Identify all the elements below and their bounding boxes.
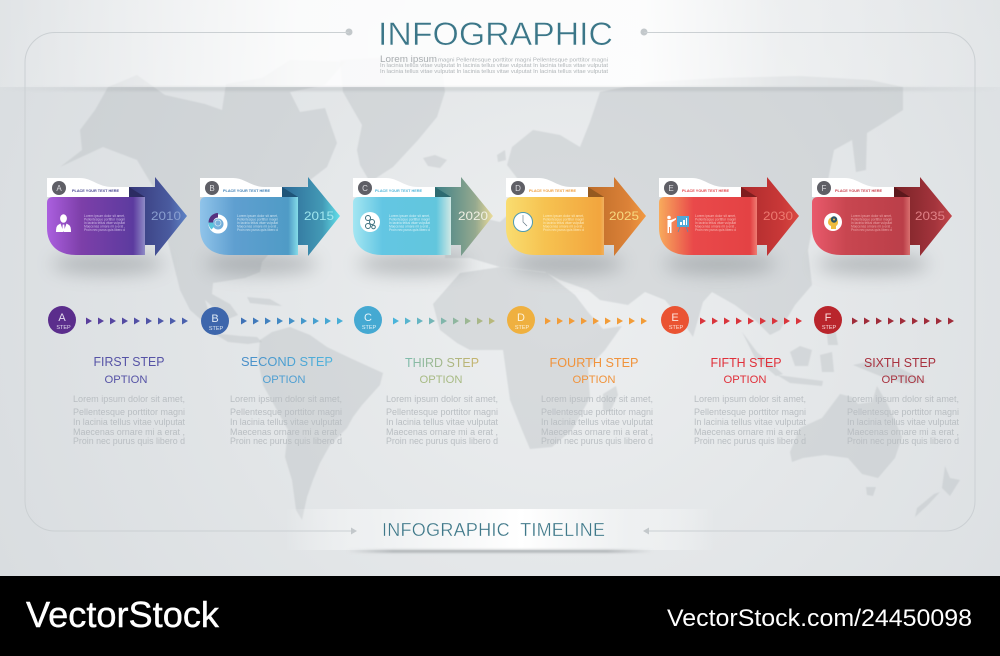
- step text E: OPTION: [724, 374, 767, 386]
- step text C: OPTION: [420, 374, 463, 386]
- step text C: Proin nec purus quis libero d: [386, 436, 498, 446]
- step text C: Maecenas ornare mi a erat ,: [386, 427, 498, 437]
- step text C: Lorem ipsum dolor sit amet,: [386, 394, 498, 404]
- card C: Proin nec purus quis libero d: [389, 228, 430, 232]
- card F: Proin nec purus quis libero d: [851, 228, 892, 232]
- card E: 2030: [763, 211, 793, 223]
- card A: Lorem ipsum dolor sit amet,: [84, 214, 125, 218]
- step text C: In lacinia tellus vitae vulputat: [386, 417, 498, 427]
- watermark bar: [0, 576, 1000, 656]
- step badge C: C: [364, 312, 372, 324]
- arrow row E: [700, 318, 802, 324]
- card B: [200, 177, 340, 274]
- step badge D: D: [517, 312, 525, 324]
- header subtitle: Lorem ipsum: [380, 54, 437, 65]
- step badge F: F: [825, 312, 832, 324]
- title: INFOGRAPHIC: [378, 16, 613, 52]
- step text E: Proin nec purus quis libero d: [694, 436, 806, 446]
- step text F: Proin nec purus quis libero d: [847, 436, 959, 446]
- outer rounded frame: [25, 32, 975, 531]
- card E: PLACE YOUR TEXT HERE: [682, 189, 729, 193]
- step text A: FIRST STEP: [94, 355, 164, 369]
- step text C: Pellentesque porttitor magni: [386, 407, 498, 417]
- card C: 2020: [458, 211, 488, 223]
- step badge B: B: [211, 313, 219, 325]
- card E: E: [668, 184, 674, 193]
- icon: hexagon network: [360, 212, 380, 232]
- card C: Lorem ipsum dolor sit amet,: [389, 214, 430, 218]
- card D: PLACE YOUR TEXT HERE: [529, 189, 576, 193]
- footer banner: [285, 509, 715, 552]
- card C: PLACE YOUR TEXT HERE: [375, 189, 422, 193]
- card D: [506, 177, 646, 274]
- step text F: Lorem ipsum dolor sit amet,: [847, 394, 959, 404]
- header subtitle: In lacinia tellus vitae vulputat In lacinia tellus vitae vulputat In lacinia tellus vitae vulputat: [380, 63, 609, 69]
- step text A: Lorem ipsum dolor sit amet,: [73, 394, 185, 404]
- arrow row C: [393, 318, 495, 324]
- card C: Maecenas ornare mi a erat ,: [389, 224, 430, 228]
- step badge B: [201, 307, 229, 335]
- step text C: [386, 356, 498, 446]
- card D: Lorem ipsum dolor sit amet,: [543, 214, 584, 218]
- step text F: Pellentesque porttitor magni: [847, 407, 959, 417]
- step text A: OPTION: [104, 374, 148, 386]
- step badge A: STEP: [56, 325, 71, 331]
- header band: [0, 0, 1000, 91]
- card D: Proin nec purus quis libero d: [543, 228, 584, 232]
- icon: head with gear: [824, 213, 842, 231]
- card E: In lacinia tellus vitae vulputat: [695, 221, 736, 225]
- step badge C: [354, 306, 382, 334]
- step text E: Maecenas ornare mi a erat ,: [694, 427, 806, 437]
- card B: Maecenas ornare mi a erat ,: [237, 224, 278, 228]
- step text F: OPTION: [882, 374, 925, 386]
- step badge D: STEP: [515, 325, 530, 331]
- card A: [47, 177, 187, 274]
- step badge F: [814, 306, 842, 334]
- step text B: Pellentesque porttitor magni: [230, 407, 342, 417]
- brand logo text: VectorStock: [26, 594, 220, 635]
- card D: Pellentesque porttitor magni: [543, 218, 584, 222]
- card D: Maecenas ornare mi a erat ,: [543, 224, 584, 228]
- step text D: OPTION: [572, 374, 616, 386]
- card A: Pellentesque porttitor magni: [84, 218, 125, 222]
- step text D: Lorem ipsum dolor sit amet,: [541, 394, 653, 404]
- step text F: [847, 356, 959, 446]
- step text B: Lorem ipsum dolor sit amet,: [230, 394, 342, 404]
- card C: Pellentesque porttitor magni: [389, 218, 430, 222]
- step text D: Proin nec purus quis libero d: [541, 436, 653, 446]
- icon: person: [56, 214, 71, 232]
- world map: [60, 55, 960, 520]
- card A: Proin nec purus quis libero d: [84, 228, 125, 232]
- arrow row B: [241, 318, 343, 324]
- card F: [812, 177, 952, 274]
- step text A: [73, 355, 185, 446]
- card B: Lorem ipsum dolor sit amet,: [237, 214, 278, 218]
- card C: In lacinia tellus vitae vulputat: [389, 221, 430, 225]
- card D: D: [515, 184, 521, 193]
- step text E: FIFTH STEP: [710, 356, 782, 370]
- step badge B: STEP: [209, 326, 224, 332]
- step badge E: [661, 306, 689, 334]
- image url: VectorStock.com/24450098: [667, 605, 972, 632]
- card A: 2010: [151, 211, 181, 223]
- card F: PLACE YOUR TEXT HERE: [835, 189, 882, 193]
- step text B: Maecenas ornare mi a erat ,: [230, 427, 342, 437]
- card A: A: [56, 184, 62, 193]
- card E: Lorem ipsum dolor sit amet,: [695, 214, 736, 218]
- step text A: Pellentesque porttitor magni: [73, 407, 185, 417]
- step text E: [694, 356, 806, 446]
- step text B: Proin nec purus quis libero d: [230, 436, 342, 446]
- step text B: OPTION: [262, 374, 306, 386]
- step text A: Maecenas ornare mi a erat ,: [73, 427, 185, 437]
- step badge A: A: [58, 312, 66, 324]
- step text F: Maecenas ornare mi a erat ,: [847, 427, 959, 437]
- step text D: Maecenas ornare mi a erat ,: [541, 427, 653, 437]
- card A: PLACE YOUR TEXT HERE: [72, 189, 119, 193]
- step text C: THIRD STEP: [405, 356, 479, 370]
- step badge A: [48, 306, 76, 334]
- arrow row D: [545, 318, 647, 324]
- icon: donut chart: [208, 213, 226, 232]
- card A: Maecenas ornare mi a erat ,: [84, 224, 125, 228]
- header subtitle: In lacinia tellus vitae vulputat In lacinia tellus vitae vulputat In lacinia tellus vitae vulputat: [380, 69, 609, 75]
- header subtitle: magni Pellentesque porttitor magni Pellentesque porttitor magni: [438, 58, 608, 64]
- step badge F: STEP: [822, 325, 837, 331]
- card D: 2025: [609, 211, 639, 223]
- card D: In lacinia tellus vitae vulputat: [543, 221, 584, 225]
- step text D: FOURTH STEP: [550, 356, 638, 370]
- card F: In lacinia tellus vitae vulputat: [851, 221, 892, 225]
- header subtitle: [380, 54, 609, 75]
- step text E: In lacinia tellus vitae vulputat: [694, 417, 806, 427]
- card B: Pellentesque porttitor magni: [237, 218, 278, 222]
- step badge E: E: [671, 312, 679, 324]
- icon: presenter and board: [667, 216, 689, 233]
- card B: 2015: [304, 211, 334, 223]
- card B: B: [209, 184, 215, 193]
- card A: In lacinia tellus vitae vulputat: [84, 221, 125, 225]
- card F: Maecenas ornare mi a erat ,: [851, 224, 892, 228]
- card F: Lorem ipsum dolor sit amet,: [851, 214, 892, 218]
- card E: [659, 177, 799, 274]
- step text A: Proin nec purus quis libero d: [73, 436, 185, 446]
- card B: Proin nec purus quis libero d: [237, 228, 278, 232]
- step badge C: STEP: [362, 325, 377, 331]
- card B: In lacinia tellus vitae vulputat: [237, 221, 278, 225]
- icon: clock: [514, 212, 532, 232]
- step text B: SECOND STEP: [241, 355, 333, 369]
- step text D: Pellentesque porttitor magni: [541, 407, 653, 417]
- card F: 2035: [915, 211, 945, 223]
- step text F: In lacinia tellus vitae vulputat: [847, 417, 959, 427]
- step text D: [541, 356, 653, 446]
- card E: Proin nec purus quis libero d: [695, 228, 736, 232]
- step text B: In lacinia tellus vitae vulputat: [230, 417, 342, 427]
- step badge D: [507, 306, 535, 334]
- footer title: INFOGRAPHIC TIMELINE: [382, 520, 605, 540]
- card C: C: [362, 184, 368, 193]
- step text F: SIXTH STEP: [864, 356, 936, 370]
- card F: Pellentesque porttitor magni: [851, 218, 892, 222]
- card C: [353, 177, 493, 274]
- step text D: In lacinia tellus vitae vulputat: [541, 417, 653, 427]
- card B: PLACE YOUR TEXT HERE: [223, 189, 270, 193]
- step text B: [230, 355, 342, 446]
- card F: F: [822, 184, 827, 193]
- step badge E: STEP: [669, 325, 684, 331]
- step text E: Lorem ipsum dolor sit amet,: [694, 394, 806, 404]
- arrow row A: [86, 318, 188, 324]
- card E: Pellentesque porttitor magni: [695, 218, 736, 222]
- card E: Maecenas ornare mi a erat ,: [695, 224, 736, 228]
- arrow row F: [852, 318, 954, 324]
- step text E: Pellentesque porttitor magni: [694, 407, 806, 417]
- step text A: In lacinia tellus vitae vulputat: [73, 417, 185, 427]
